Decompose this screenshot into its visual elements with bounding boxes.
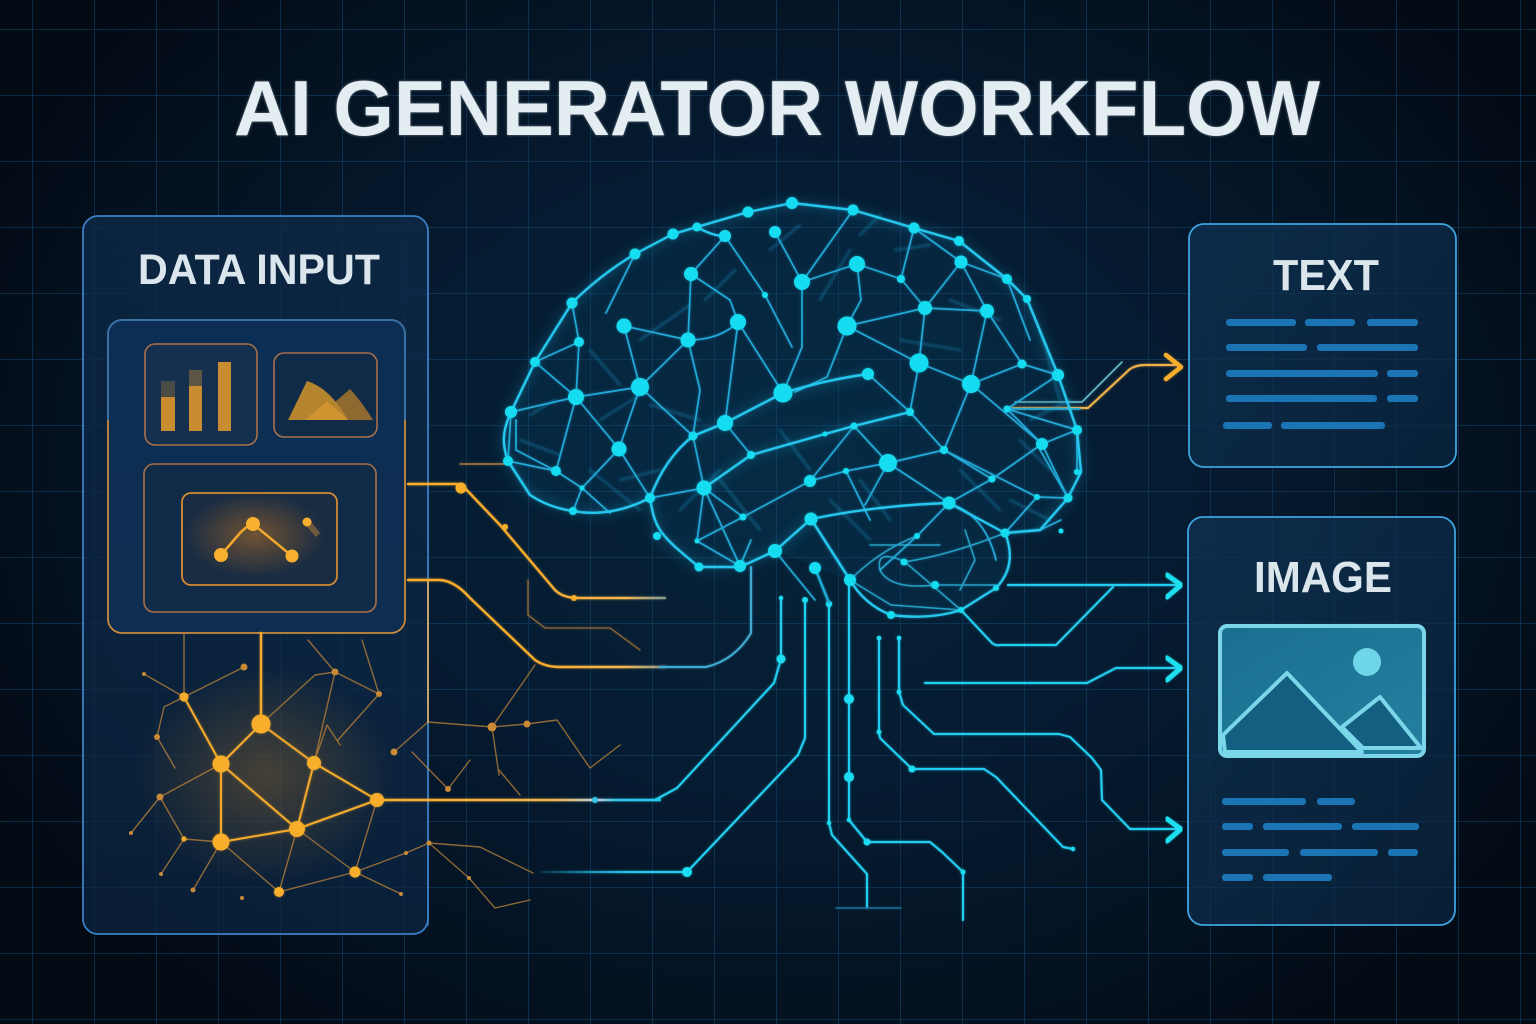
card: line chart bbox=[144, 464, 376, 612]
brain faint wisps bbox=[520, 215, 1070, 540]
brain soft glow bbox=[504, 203, 1081, 567]
arrow: to text bbox=[1010, 355, 1181, 408]
card: bar chart bbox=[145, 344, 257, 445]
brain nodes bbox=[503, 197, 1082, 619]
brain silhouette fill bbox=[504, 203, 1081, 616]
panel: image output bbox=[1188, 517, 1455, 925]
heading: data input: DATA INPUT bbox=[138, 246, 380, 294]
brain bbox=[504, 203, 1081, 617]
arrow: to image top bbox=[1167, 575, 1181, 597]
title: AI GENERATOR WORKFLOW bbox=[234, 64, 1320, 152]
card: mountain chart bbox=[274, 353, 377, 437]
heading: text: TEXT bbox=[1273, 251, 1379, 300]
arrow: to image middle bbox=[1167, 658, 1181, 680]
text lines bbox=[1223, 319, 1418, 429]
inner panel: data sources bbox=[108, 320, 405, 633]
heading: image: IMAGE bbox=[1254, 553, 1392, 602]
brain thick outline and main sulci bbox=[504, 203, 1081, 617]
icon: picture bbox=[1220, 626, 1424, 756]
panel: data input bbox=[83, 216, 428, 934]
brain cerebellum folds bbox=[850, 530, 1005, 610]
orange network bbox=[131, 580, 620, 925]
blue wire junction nodes bbox=[682, 596, 1075, 877]
orange nodes bbox=[180, 692, 384, 897]
panel: text output bbox=[1189, 224, 1456, 467]
caption lines bbox=[1222, 798, 1419, 881]
blue wires: brain stem circuit lines bbox=[540, 567, 1180, 920]
brain thin links bbox=[508, 210, 1080, 603]
orange wires: data input to brain bbox=[377, 464, 665, 803]
arrow: to image bottom bbox=[1167, 819, 1181, 841]
orange glow behind network bbox=[135, 665, 395, 885]
